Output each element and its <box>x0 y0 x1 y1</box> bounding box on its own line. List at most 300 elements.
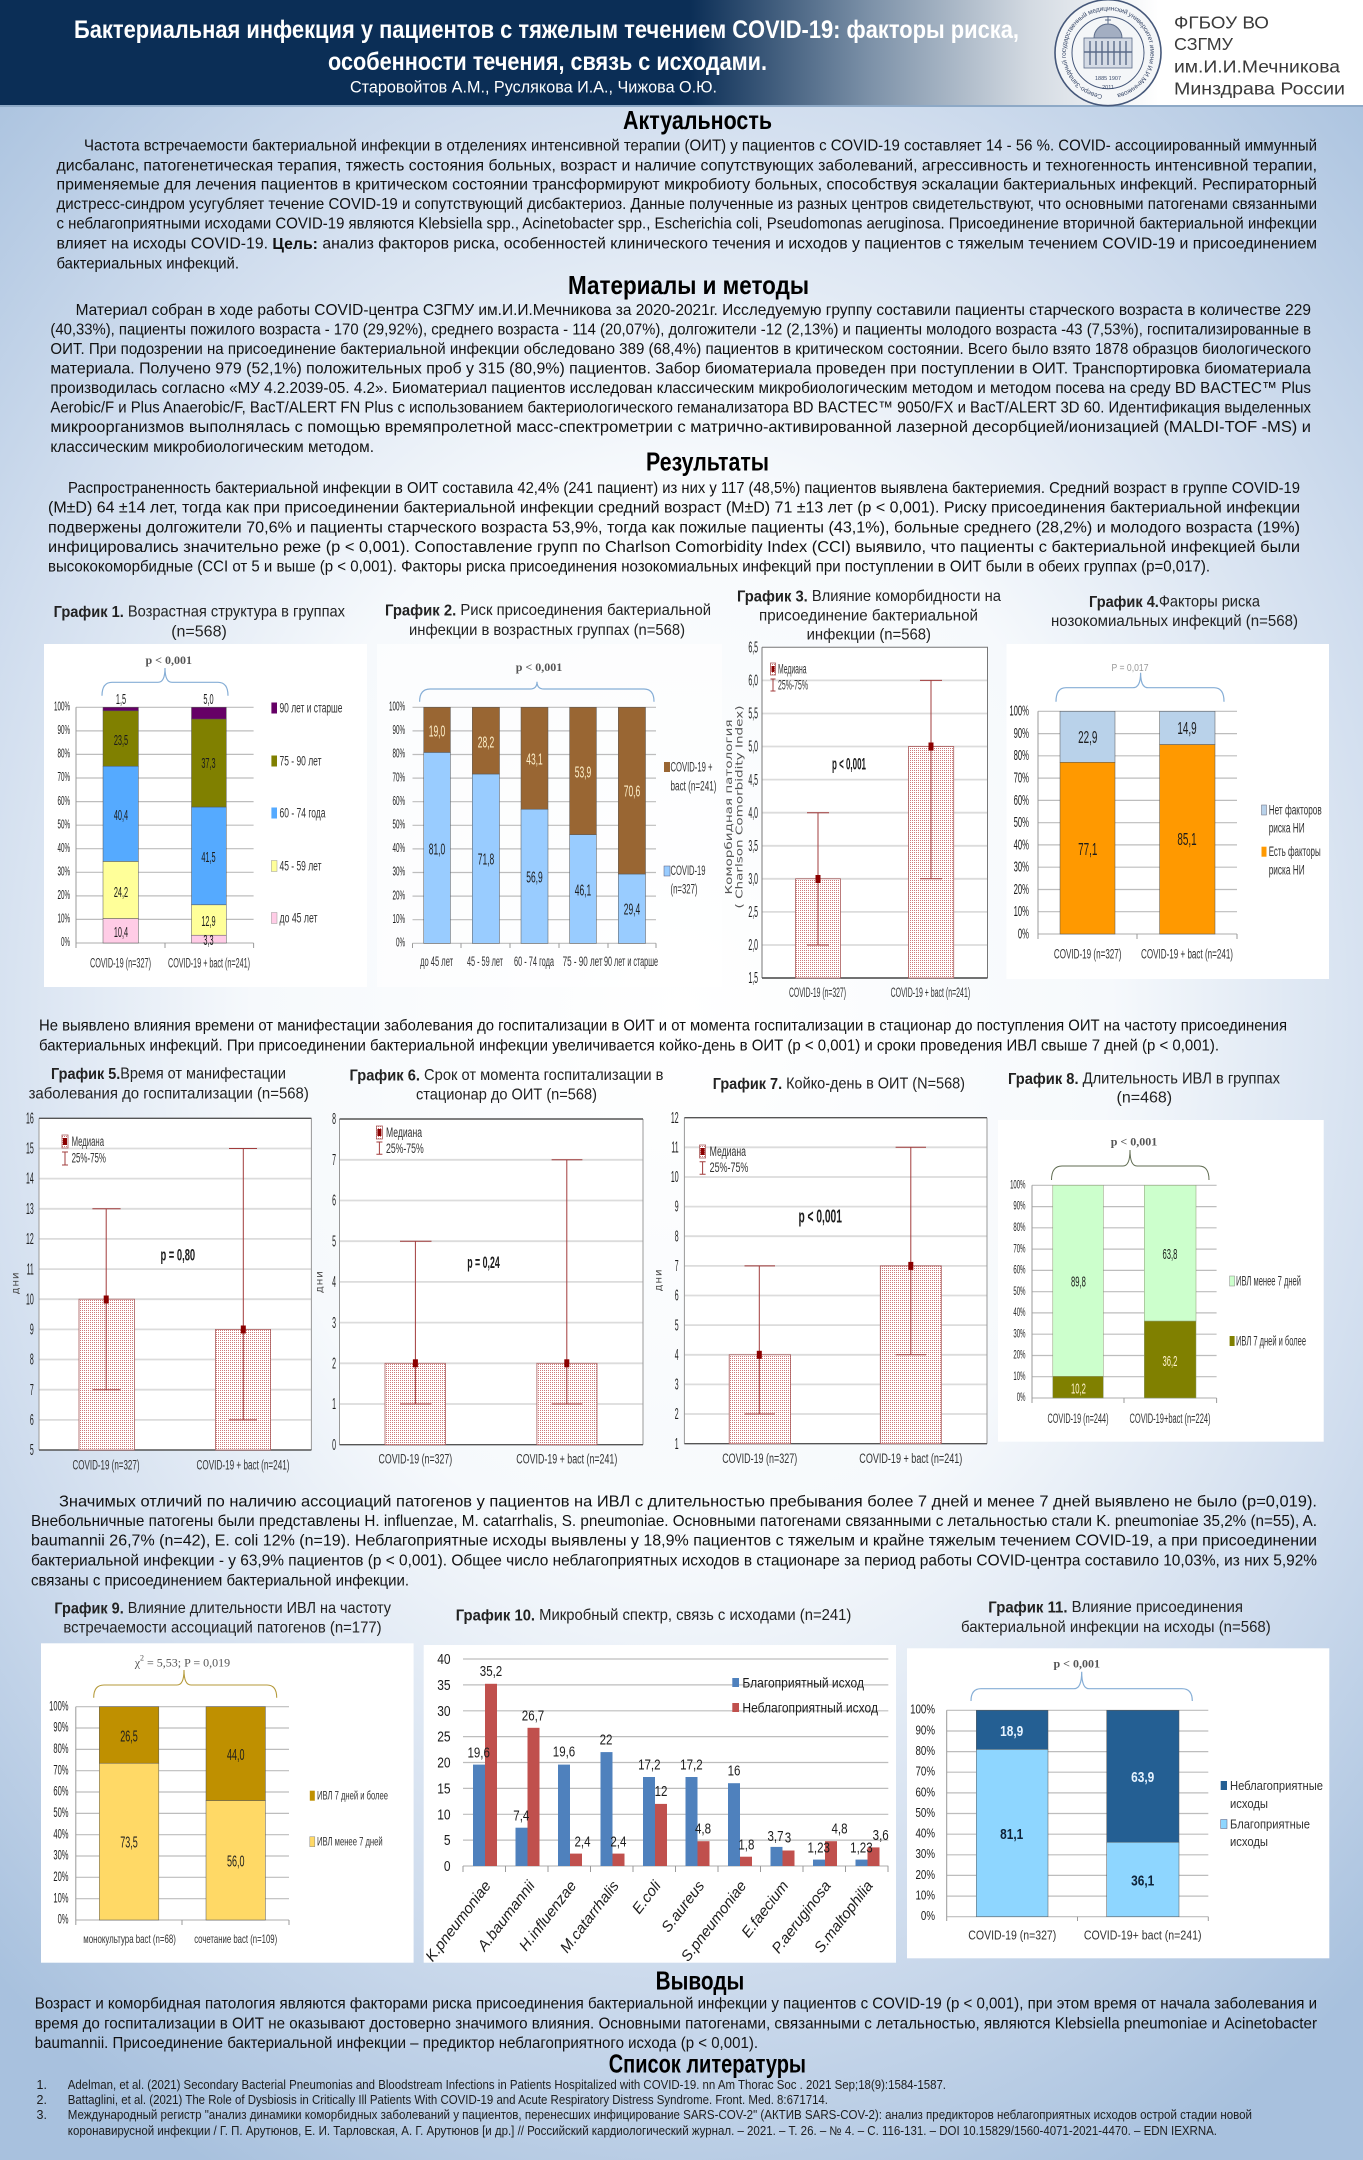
value labels: 18,9 <box>1000 1723 1023 1739</box>
axis labels: 5 <box>675 1316 679 1334</box>
significance brace <box>102 653 228 696</box>
reference list: 2. <box>36 2093 47 2107</box>
axis labels: 80% <box>53 1742 68 1757</box>
chart 2 heading: инфекции в возрастных группах (n=568) <box>409 622 685 639</box>
institution name <box>1174 13 1345 98</box>
axis labels: 2 <box>675 1405 679 1423</box>
category labels: COVID-19 + bact (n=241) <box>196 1458 290 1472</box>
axis labels <box>1009 703 1029 942</box>
species labels: H.influenzae <box>516 1878 580 1954</box>
chart 4 heading <box>1051 594 1298 630</box>
legend: COVID-19 <box>670 863 706 878</box>
axis labels: 80% <box>1013 1221 1026 1235</box>
value labels: 35,2 <box>480 1663 502 1679</box>
axis labels: 100% <box>54 700 70 714</box>
category labels: COVID-19 (n=327) <box>722 1451 797 1466</box>
axis labels: 0% <box>921 1910 935 1923</box>
significance brace <box>94 1653 277 1698</box>
axis labels: 4,5 <box>748 771 758 789</box>
value labels: 37,3 <box>201 754 216 772</box>
axis labels: 80% <box>915 1745 935 1758</box>
reference list: Adelman, et al. (2021) Secondary Bacterial Pneumonias and Bloodstream Infections in Patients Hospitalized with COVID-19. nn Am Thorac Soc . 2021 Sep;18(9):1584-1587. <box>68 2078 946 2092</box>
axis labels: 35 <box>437 1677 451 1693</box>
axis labels: 5 <box>332 1232 336 1250</box>
panel: chart 4 nosocomial risk factors <box>1006 594 1329 979</box>
reference list <box>36 2078 1252 2138</box>
axis labels: 11 <box>671 1138 679 1156</box>
axis labels: 70% <box>915 1765 935 1779</box>
value labels: 56,0 <box>227 1853 244 1870</box>
axis labels: 3,5 <box>748 837 758 855</box>
institution name: Минздрава России <box>1174 78 1345 98</box>
text block: materials and methods: производилась согласно «МУ 4.2.2039-05. 4.2». Биоматериал пациентов исследован классическим микробиологическим методом и методом посева на среду BD BACTEC™ Plus <box>50 380 1311 397</box>
legend <box>62 1134 106 1166</box>
authors: Старовойтов А.М., Руслякова И.А., Чижова О.Ю. <box>350 78 717 96</box>
axis labels <box>389 700 405 950</box>
median bars with whiskers <box>385 1160 597 1445</box>
axis labels: 90% <box>392 724 405 738</box>
legend <box>310 1789 388 1849</box>
category labels <box>72 1458 290 1472</box>
poster title <box>74 16 1019 76</box>
category labels <box>1048 1411 1210 1426</box>
value labels: 26,5 <box>120 1728 138 1745</box>
text block: hospitalization timing finding <box>39 1018 1287 1054</box>
axis labels: 10 <box>437 1806 451 1823</box>
value labels <box>467 1663 889 1856</box>
axis labels: 5,0 <box>748 737 758 756</box>
text block: materials and methods: микроорганизмов выполнялась с помощью времяпролетной масс-спектрометрии с матрично-активированной лазерной десорбцией/ионизацией (MALDI-TOF -MS) и <box>50 419 1311 436</box>
axis labels: 2,5 <box>748 903 758 921</box>
legend: 90 лет и старше <box>280 700 342 716</box>
axis labels <box>54 700 70 950</box>
chart 10 heading: График 10. Микробный спектр, связь с исходами (n=241) <box>456 1607 851 1624</box>
axis labels: 1 <box>675 1435 679 1453</box>
legend: до 45 лет <box>280 910 318 926</box>
category labels: COVID-19 (n=327) <box>968 1928 1056 1942</box>
axis labels <box>49 1699 68 1927</box>
significance brace: p < 0,001 <box>1111 1134 1157 1148</box>
axis labels: 1,5 <box>748 969 758 987</box>
legend: Медиана <box>710 1144 746 1159</box>
value labels: 53,9 <box>575 762 591 781</box>
value labels <box>120 1728 244 1870</box>
category labels <box>379 1452 617 1466</box>
axis labels: 10 <box>671 1168 679 1186</box>
legend <box>1230 1274 1306 1348</box>
species labels: S.maltophilia <box>811 1878 877 1956</box>
heading: conclusions: Выводы <box>656 1966 744 1996</box>
value labels: 3,6 <box>873 1827 889 1843</box>
category labels: до 45 лет <box>420 954 453 969</box>
axis labels: 5 <box>30 1441 34 1459</box>
stacked bars <box>1053 1185 1196 1398</box>
axis labels: 20% <box>915 1869 935 1882</box>
legend: 25%-75% <box>72 1150 106 1166</box>
median bars with whiskers <box>79 1148 271 1450</box>
significance brace <box>1056 663 1224 702</box>
chart 6 heading <box>350 1067 664 1104</box>
value labels: 19,6 <box>467 1744 490 1761</box>
p value: p < 0,001 <box>798 1207 842 1227</box>
axis labels: 6 <box>30 1411 34 1429</box>
value labels: 2,4 <box>610 1833 627 1850</box>
axis labels: 7 <box>675 1257 679 1275</box>
value labels: 81,0 <box>429 840 445 858</box>
text block: materials and methods: Материал собран в ходе работы COVID-центра СЗГМУ им.И.И.Мечникова за 2020-2021г. Исследуемую группу составили пациенты старческого возраста в количестве 229 <box>76 302 1311 319</box>
category labels <box>789 985 970 1000</box>
value labels: 3,7 <box>767 1828 784 1844</box>
category labels: сочетание bact (n=109) <box>194 1932 277 1946</box>
axis labels <box>910 1704 935 1923</box>
legend: Нет факторов <box>1269 802 1322 818</box>
text block: conclusions <box>35 1996 1318 2052</box>
reference list: 3. <box>36 2108 47 2122</box>
chart 2 heading: График 2. Риск присоединения бактериальной <box>385 602 711 619</box>
axis labels: 90% <box>915 1724 935 1738</box>
axis labels: 50% <box>53 1806 68 1821</box>
axis labels: 50% <box>392 818 405 832</box>
axis labels: 40 <box>437 1651 451 1667</box>
chart 6 heading: стационар до ОИТ (n=568) <box>416 1086 597 1104</box>
value labels: 41,5 <box>201 848 216 866</box>
species labels: M.catarrhalis <box>557 1877 623 1956</box>
legend: 25%-75% <box>386 1141 424 1156</box>
text block: pathogens and outcomes: Значимых отличий по наличию ассоциаций патогенов у пациентов на ИВЛ с длительностью пребывания более 7 дней и менее 7 дней выявлено не было (p=0,019). <box>59 1494 1317 1510</box>
value labels: 1,5 <box>116 690 126 708</box>
axis labels <box>748 638 758 987</box>
axis labels: 6,0 <box>748 671 758 689</box>
category labels: COVID-19+bact (n=224) <box>1130 1411 1210 1426</box>
value labels: 56,9 <box>526 867 543 886</box>
axis labels: 70% <box>392 771 405 785</box>
value labels: 4,8 <box>695 1820 711 1837</box>
legend <box>271 700 342 926</box>
text block: conclusions: время до госпитализации в ОИТ не оказывают достоверно значимого влияния. Основными патогенами, связанными с летальностью, являются Klebsiella pneumoniae и Acinetobacter <box>35 2016 1318 2032</box>
axis labels: 10% <box>392 913 405 927</box>
species labels: S.aureus <box>658 1877 709 1936</box>
panel: chart 5 time to hospitalization <box>10 1066 311 1472</box>
text block: relevance: Частота встречаемости бактериальной инфекции в отделениях интенсивной терапии (ОИТ) у пациентов с COVID-19 составляет 14 - 56 %. COVID- ассоциированный иммунный <box>84 138 1317 154</box>
axis labels <box>332 1110 336 1454</box>
value labels: 77,1 <box>1078 840 1097 860</box>
axis labels: 50% <box>915 1807 935 1820</box>
heading: relevance: Актуальность <box>623 105 772 135</box>
axis labels: 100% <box>1010 1178 1026 1192</box>
text block: results: подвержены долгожители 70,6% и пациенты старческого возраста 53,9%, тогда как пожилые пациенты (43,1%), больные среднего (28,2%) и молодого возраста (19%) <box>48 520 1300 536</box>
chart 11 heading: бактериальной инфекции на исходы (n=568) <box>961 1619 1271 1636</box>
category labels: COVID-19 (n=327) <box>72 1458 140 1472</box>
category labels <box>1054 946 1233 962</box>
axis labels: 70% <box>1013 1242 1026 1256</box>
text block: materials and methods: материала. Получено 979 (52,1%) положительных проб у 315 (80,9%) пациентов. Забор биоматериала проведен при поступлении в ОИТ. Транспортировка биоматериала <box>50 360 1311 378</box>
category labels: 60 - 74 года <box>514 954 554 969</box>
axis labels: 90% <box>57 724 70 738</box>
text block: hospitalization timing finding: Не выявлено влияния времени от манифестации заболевания до госпитализации в ОИТ и от момента госпитализации в стационар до поступления ОИТ на частоту присоединения <box>39 1018 1287 1034</box>
legend: COVID-19 + <box>670 760 713 774</box>
axis labels: 40% <box>1013 1306 1026 1320</box>
value labels: 36,1 <box>1131 1872 1154 1889</box>
axis labels: 5,5 <box>748 704 758 723</box>
chart 4 heading: График 4.Факторы риска <box>1089 594 1260 610</box>
text block: results <box>48 480 1300 576</box>
value labels: 63,9 <box>1131 1769 1154 1786</box>
heading: materials and methods: Материалы и методы <box>568 270 809 300</box>
value labels <box>1071 1245 1178 1398</box>
panel: chart 3 comorbidity: p < 0,001 <box>832 754 866 774</box>
stacked bars <box>424 707 646 943</box>
chart 1 heading: (n=568) <box>171 624 227 640</box>
value labels: 43,1 <box>526 750 543 768</box>
header banner <box>0 0 1363 107</box>
chart 6 heading: График 6. Срок от момента госпитализации в <box>350 1067 664 1084</box>
value labels: 12,9 <box>201 912 216 930</box>
category labels: COVID-19 (n=327) <box>379 1452 452 1466</box>
significance brace: p < 0,001 <box>516 660 562 674</box>
axis labels: 50% <box>1014 815 1029 831</box>
value labels: 28,2 <box>478 732 494 751</box>
text block: results: инфицировались значительно реже (p < 0,001). Сопоставление групп по Charlson Comorbidity Index (CCI) выявило, что пациенты с бактериальной инфекцией были <box>48 539 1300 556</box>
value labels: 12 <box>655 1783 667 1799</box>
axis labels: 80% <box>392 748 405 761</box>
legend: Медиана <box>72 1134 104 1149</box>
stacked bars <box>103 707 226 943</box>
axis labels: 40% <box>57 842 70 856</box>
chart 5 heading: График 5.Время от манифестации <box>51 1066 286 1082</box>
stacked bars <box>99 1707 265 1920</box>
p value: p = 0,80 <box>160 1246 195 1264</box>
axis labels: 30% <box>1014 859 1029 875</box>
axis labels: 12 <box>671 1109 679 1127</box>
institution name: ФГБОУ ВО <box>1174 13 1269 33</box>
value labels: 5,0 <box>203 690 214 708</box>
axis labels: 50% <box>1013 1285 1026 1299</box>
chart 3 heading: присоединение бактериальной <box>759 608 978 624</box>
text block: conclusions: baumannii. Присоединение бактериальной инфекции – предиктор неблагоприятного исхода (p < 0,001). <box>35 2035 758 2052</box>
axis labels: 30% <box>53 1849 68 1863</box>
category labels: COVID-19 (n=244) <box>1048 1411 1108 1426</box>
axis labels: 60% <box>57 795 70 809</box>
legend: Есть факторы <box>1269 844 1321 859</box>
median bars with whiskers <box>796 680 954 978</box>
chart 8 heading: (n=468) <box>1117 1090 1172 1106</box>
text block: pathogens and outcomes: связаны с присоединением бактериальной инфекции. <box>31 1572 409 1590</box>
legend: исходы <box>1230 1834 1268 1849</box>
category labels <box>968 1928 1202 1942</box>
legend: 60 - 74 года <box>280 806 326 820</box>
axis labels: 12 <box>26 1230 34 1248</box>
axis labels: 5 <box>444 1832 451 1848</box>
text block: results: (M±D) 64 ±14 лет, тогда как при присоединении бактериальной инфекции средний возраст (M±D) 71 ±13 лет (p < 0,001). Риску присоединения бактериальной инфекции <box>48 500 1300 516</box>
legend: bact (n=241) <box>670 778 716 794</box>
axis labels: 4 <box>675 1346 679 1364</box>
species labels <box>422 1877 877 1965</box>
text block: materials and methods: ОИТ. При подозрении на присоединение бактериальной инфекции обследовано 389 (68,4%) пациентов в критическом состоянии. Всего было взято 1878 образцов биологического <box>50 341 1311 358</box>
value labels: 36,2 <box>1163 1352 1178 1370</box>
poster title: Бактериальная инфекция у пациентов с тяжелым течением COVID-19: факторы риска, <box>74 16 1019 44</box>
grouped bars: unfavourable <box>485 1684 880 1866</box>
axis labels: 13 <box>26 1200 34 1218</box>
axis labels: 0% <box>396 936 405 950</box>
axis labels: 0% <box>1017 1391 1026 1405</box>
heading: references: Список литературы <box>609 2048 806 2078</box>
value labels <box>429 721 640 918</box>
value labels: 10,4 <box>114 923 128 941</box>
axis labels: 10% <box>1014 904 1029 920</box>
chart 2 heading <box>385 602 711 639</box>
axis labels: 8 <box>675 1227 679 1245</box>
value labels: 7,4 <box>513 1807 530 1824</box>
axis labels: 8 <box>332 1110 336 1128</box>
text block: pathogens and outcomes: Внебольничные патогены были представлены H. influenzae, M. catarrhalis, S. pneumoniae. Основными патогенами связанными с летальностью стали K. pneumoniae 35,2% (n=55), A. <box>31 1513 1317 1530</box>
legend <box>732 1675 878 1716</box>
legend <box>664 760 716 896</box>
axis labels: 1 <box>332 1395 336 1413</box>
value labels: 26,7 <box>522 1707 544 1724</box>
axis labels: 20% <box>392 889 405 903</box>
category labels: COVID-19 + bact (n=241) <box>859 1451 962 1466</box>
axis labels: 15 <box>437 1780 451 1797</box>
value labels: 17,2 <box>638 1756 661 1773</box>
axis labels: 40% <box>1014 837 1029 853</box>
axis labels: 9 <box>30 1320 34 1338</box>
axis labels <box>671 1109 679 1453</box>
legend <box>700 1144 748 1175</box>
axis labels: 30% <box>392 866 405 879</box>
value labels: 19,6 <box>553 1743 575 1760</box>
chart 5 heading: заболевания до госпитализации (n=568) <box>29 1086 309 1102</box>
axis labels: 2 <box>332 1354 336 1372</box>
value labels: 2,4 <box>574 1833 591 1850</box>
stacked bars <box>1060 711 1215 934</box>
significance brace: p < 0,001 <box>1053 1656 1100 1670</box>
chart 11 heading <box>961 1599 1271 1636</box>
y axis title: дни <box>10 1272 22 1294</box>
chart 5 heading <box>29 1066 309 1102</box>
panel: chart 6 time to ICU <box>314 1067 664 1466</box>
value labels: 17,2 <box>680 1756 703 1773</box>
axis labels: 90% <box>53 1721 68 1735</box>
axis labels: 11 <box>27 1260 34 1278</box>
axis labels: 40% <box>392 842 405 856</box>
species labels: K.pneumoniae <box>422 1878 495 1965</box>
text block: relevance: влияет на исходы COVID-19. Цель: анализ факторов риска, особенностей клинического течения и исходов у пациентов с тяжелым течением COVID-19 и присоединением <box>56 236 1317 252</box>
text block: conclusions: Возраст и коморбидная патология являются факторами риска присоединения бактериальной инфекции у пациентов с COVID-19 (p < 0,001), при этом время от начала заболевания и <box>35 1996 1317 2012</box>
axis labels: 80% <box>57 747 70 761</box>
legend <box>376 1125 424 1156</box>
value labels: 85,1 <box>1177 830 1197 850</box>
value labels: 46,1 <box>575 881 591 899</box>
species labels: P.aeruginosa <box>769 1878 835 1957</box>
axis labels: 7 <box>332 1151 336 1169</box>
chart 11 heading: График 11. Влияние присоединения <box>988 1599 1243 1616</box>
value labels <box>1000 1723 1154 1889</box>
category labels: COVID-19 (n=327) <box>789 985 846 1000</box>
value labels: 22 <box>600 1731 612 1748</box>
axis labels: 20% <box>53 1870 68 1885</box>
legend: Неблагоприятные <box>1230 1778 1323 1793</box>
axis labels: 0% <box>61 936 70 950</box>
value labels: 40,4 <box>114 806 128 824</box>
axis labels: 6 <box>675 1286 679 1305</box>
reference list: Международный регистр "анализ динамики коморбидных заболеваний у пациентов, перенесших инфицирование SARS-COV-2" (АКТИВ SARS-COV-2): анализ предикторов неблагоприятных исходов острой стадии новой <box>68 2108 1252 2122</box>
category labels <box>420 954 658 969</box>
significance brace: χ <box>135 1656 140 1670</box>
y axis title: ( Charlson Comorbidity Index) <box>734 705 746 908</box>
axis labels: 4 <box>332 1273 336 1291</box>
chart 3 heading: инфекции (n=568) <box>807 626 931 644</box>
median bars with whiskers <box>729 1147 941 1444</box>
chart 3 heading: График 3. Влияние коморбидности на <box>737 588 1001 605</box>
axis labels: 60% <box>1014 792 1029 809</box>
axis labels: 20% <box>1013 1349 1026 1362</box>
value labels: 24,2 <box>114 883 128 901</box>
reference list: 1. <box>36 2078 47 2092</box>
species labels: A.baumannii <box>474 1877 539 1955</box>
category labels: 45 - 59 лет <box>467 954 503 969</box>
category labels <box>722 1451 962 1466</box>
value labels: 4,8 <box>831 1820 848 1837</box>
value labels: 16 <box>728 1762 740 1779</box>
value labels: 23,5 <box>114 731 128 749</box>
axis labels: 4,0 <box>748 804 758 822</box>
axis labels <box>1010 1178 1026 1405</box>
axis labels: 100% <box>49 1699 68 1714</box>
axis labels: 30 <box>437 1703 451 1719</box>
axis labels: 3 <box>675 1375 679 1393</box>
chart 1 heading: График 1. Возрастная структура в группах <box>54 604 345 620</box>
legend: ИВЛ менее 7 дней <box>317 1835 383 1849</box>
axis labels: 90% <box>1013 1200 1026 1214</box>
legend: исходы <box>1230 1796 1268 1811</box>
chart 7 heading: График 7. Койко-день в ОИТ (N=568) <box>713 1076 965 1092</box>
axis labels: 60% <box>53 1785 68 1799</box>
value labels: 73,5 <box>120 1834 138 1851</box>
legend: ИВЛ 7 дней и более <box>317 1789 388 1803</box>
chart 9 heading: встречаемости ассоциаций патогенов (n=177) <box>63 1620 382 1636</box>
category labels: COVID-19 (n=327) <box>1054 946 1121 962</box>
axis labels: 40% <box>53 1827 68 1842</box>
category labels: 75 - 90 лет <box>563 954 603 969</box>
value labels: 3 <box>785 1829 791 1846</box>
axis labels: 100% <box>1009 703 1029 719</box>
axis labels: 70% <box>1014 770 1029 786</box>
chart 3 heading <box>737 588 1001 644</box>
value labels: 44,0 <box>227 1746 244 1764</box>
panel: chart 8 ventilation duration <box>998 1070 1324 1442</box>
value labels: 71,8 <box>478 850 494 868</box>
value labels: 81,1 <box>1000 1826 1023 1843</box>
axis labels: 0 <box>444 1858 451 1874</box>
legend: Благоприятные <box>1230 1816 1310 1832</box>
axis labels: 40% <box>915 1827 935 1841</box>
axis labels: 10% <box>915 1889 935 1903</box>
axis labels: 3 <box>332 1314 336 1332</box>
stacked bars <box>976 1710 1179 1917</box>
value labels: 19,0 <box>429 721 445 740</box>
text block: results: Распространенность бактериальной инфекции в ОИТ составила 42,4% (241 пациент) из них у 117 (48,5%) пациентов выявлена бактериемия. Средний возраст в группе COVID-19 <box>68 480 1300 497</box>
value labels: 14,9 <box>1177 719 1197 739</box>
axis labels: 50% <box>57 818 70 832</box>
significance brace <box>971 1656 1192 1701</box>
value labels <box>114 690 216 949</box>
axis labels: 3,0 <box>748 870 758 888</box>
axis labels <box>26 1109 34 1459</box>
value labels: 10,2 <box>1071 1380 1086 1398</box>
axis labels: 60% <box>392 795 405 809</box>
axis labels: 80% <box>1014 748 1029 764</box>
legend: ИВЛ менее 7 дней <box>1236 1274 1301 1288</box>
